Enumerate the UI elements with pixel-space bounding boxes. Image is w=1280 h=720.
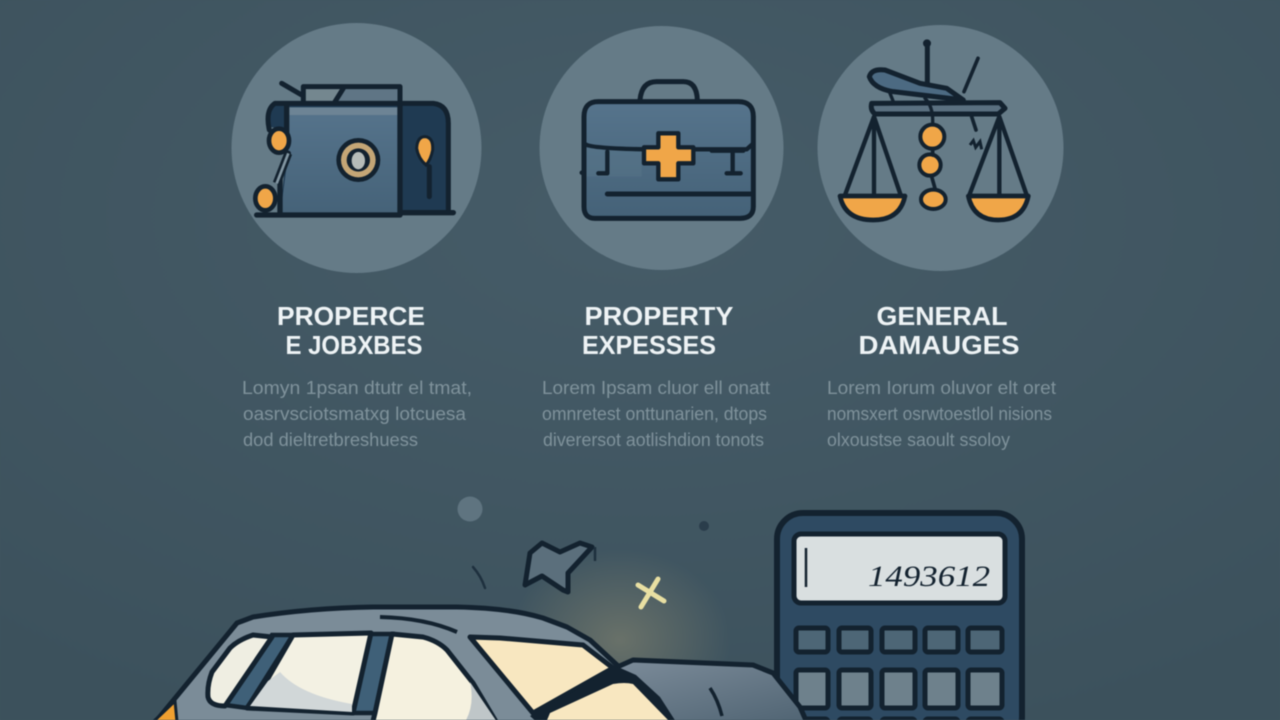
crumpled hood [530,660,808,720]
spark: cross mark [638,579,664,607]
panel: second expense column [540,26,784,450]
text block: second column [542,378,770,450]
panel: general damages column [818,25,1064,450]
heading: first column: PROPERCE [277,301,425,331]
icon: balance scale [818,25,1064,271]
debris: torn metal fragment [525,543,595,592]
calculator screen [794,534,1005,603]
text block: third column: nomsxert osrwtoestlol nisions [827,404,1052,424]
heading: first column: E JOBXBES [286,330,422,360]
text block: third column: olxoustse saoult ssoloy [827,430,1010,450]
text block: first column: oasrvsciotsmatxg lotcuesa [243,404,467,424]
text block: first column: dod dieltretbreshuess [243,430,418,450]
icon: safe in circle [232,23,482,273]
heading: third column: GENERAL [876,301,1008,331]
inner roof line [380,617,457,632]
heading: third column: DAMAUGES [858,330,1020,360]
icon: briefcase with cross [540,26,784,270]
text block: second column: omnretest onttunarien, dtops [542,404,767,424]
windshield [470,637,613,713]
rear door window [247,633,371,713]
text block: third column [827,378,1056,450]
text block: third column: Lorem Iorum oluvor elt oret [827,378,1056,398]
text block: second column: Lorem Ipsam cluor ell onatt [542,378,770,398]
orange tail light [153,701,177,720]
rear pillar band [225,634,392,713]
text block: first column: Lomyn 1psan dtutr el tmat, [242,378,472,398]
calculator screen: 1493612 [868,560,990,593]
calculator keys [796,628,1002,720]
text block: first column [242,378,472,450]
rear quarter window [208,635,272,706]
glow behind crash [510,550,730,720]
front door window [372,634,498,720]
text block: second column: diverersot aotlishdion tonots [543,430,764,450]
heading: second column: EXPESSES [582,330,716,360]
calculator [777,513,1022,720]
heading: second column: PROPERTY [584,301,734,331]
car body [153,607,640,720]
debris: floating circle [458,496,482,522]
heading: first column [277,301,425,360]
heading: second column [582,301,734,360]
debris: small dark dot [699,521,709,531]
panel: first expense column [232,23,482,450]
debris: small shard line [473,567,485,588]
heading: third column [858,301,1020,360]
car [153,607,808,720]
